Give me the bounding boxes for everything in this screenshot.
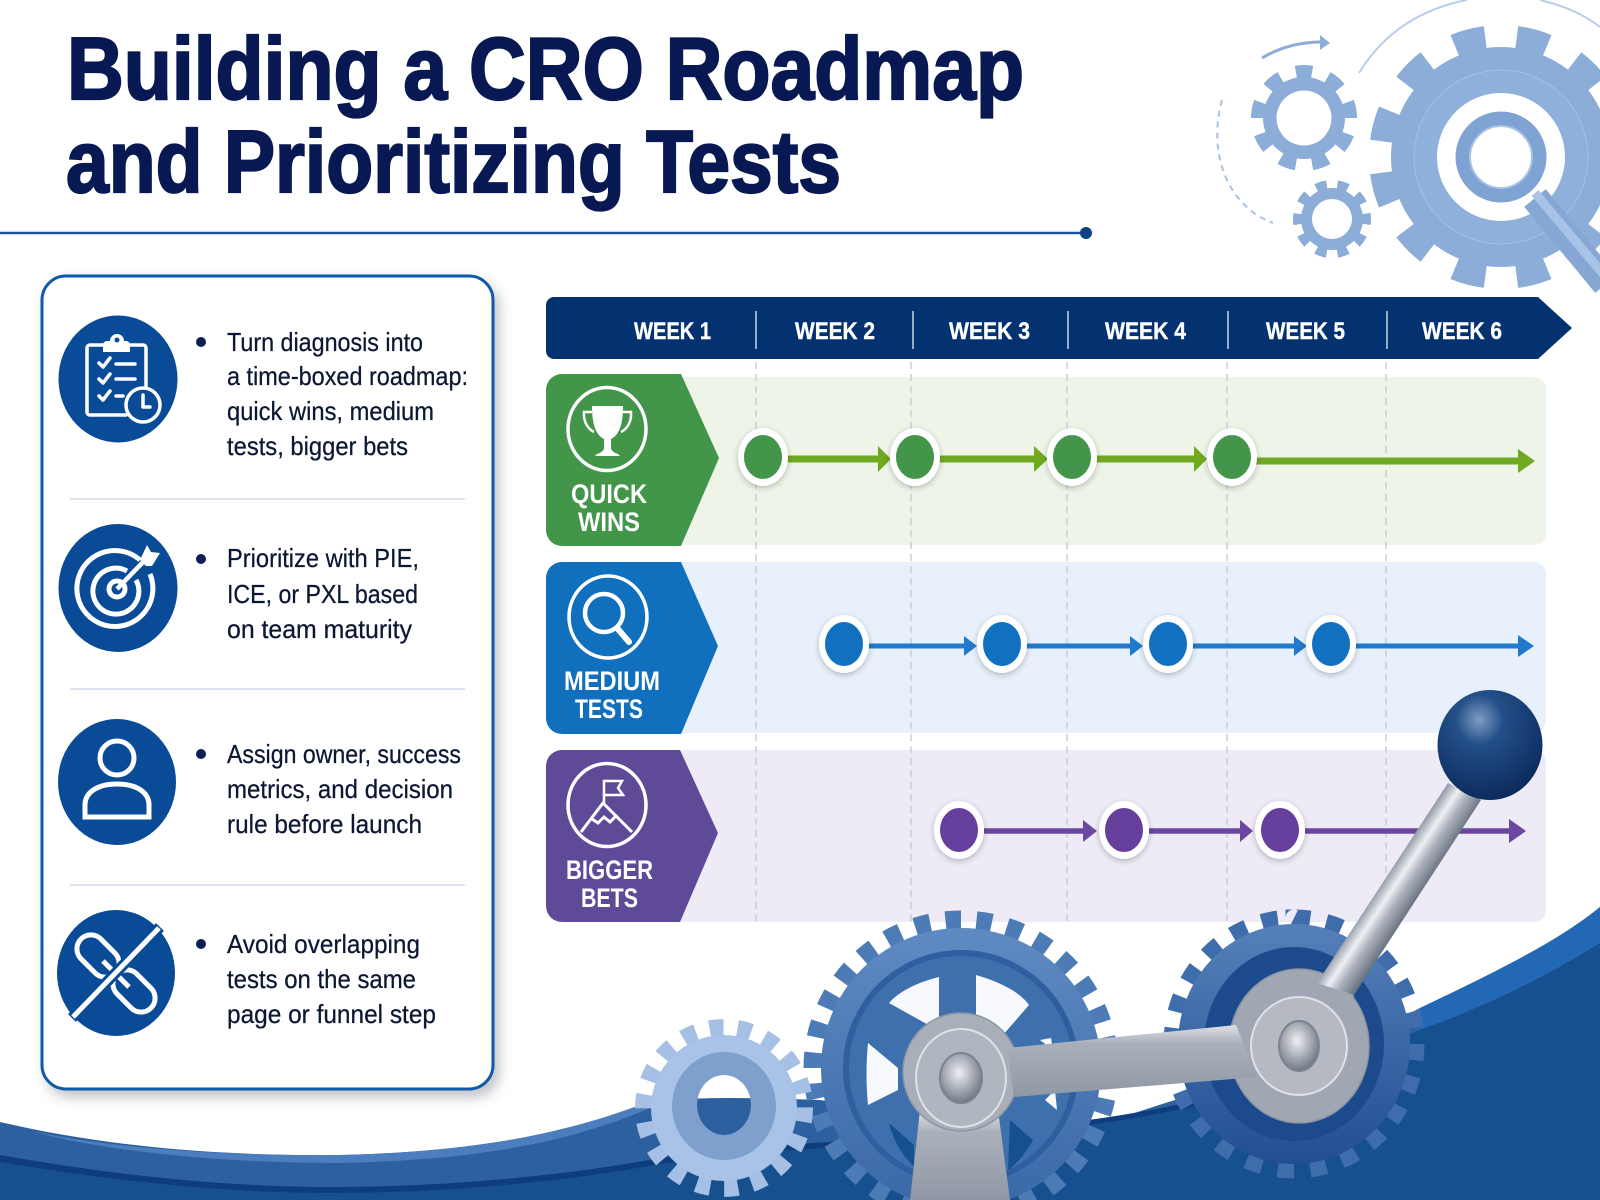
decorative gears with magnifier — [1217, 0, 1600, 292]
bullet text 1: tests, bigger bets — [227, 431, 408, 461]
row: bigger bets: BIGGER — [566, 855, 653, 885]
row: quick wins — [546, 374, 1546, 546]
lever knob — [1438, 690, 1542, 800]
timeline header: weeks: WEEK 5 — [1266, 318, 1345, 345]
small light gear — [644, 1028, 804, 1188]
bullet text 1: Turn diagnosis into — [227, 327, 423, 357]
bullet text 4: tests on the same — [227, 964, 416, 994]
week grid lines — [756, 362, 1386, 922]
bullet text 1: quick wins, medium — [227, 396, 434, 426]
large blue gear — [813, 920, 1109, 1200]
timeline header: weeks: WEEK 1 — [634, 318, 711, 345]
timeline header: weeks: WEEK 4 — [1105, 318, 1186, 345]
icon: magnifier — [569, 576, 647, 658]
row: medium tests: MEDIUM — [564, 666, 660, 696]
icon: person — [58, 719, 176, 845]
bullet text 3: Assign owner, success — [227, 739, 461, 769]
title: Building a CRO Roadmap — [67, 19, 1024, 118]
timeline header: weeks: WEEK 6 — [1422, 318, 1502, 345]
row: bigger bets — [546, 750, 1546, 922]
bullet text 3: metrics, and decision — [227, 774, 453, 804]
title — [66, 19, 1024, 211]
bullet text 1: a time-boxed roadmap: — [227, 361, 468, 391]
bullet text 3: rule before launch — [227, 809, 422, 839]
bullet text 4 — [196, 929, 436, 1029]
timeline header: weeks: WEEK 2 — [795, 318, 875, 345]
timeline: quick wins — [738, 428, 1535, 486]
bullet text 2: on team maturity — [227, 614, 412, 644]
icon: target with arrow — [58, 524, 178, 652]
bullet text 2: Prioritize with PIE, — [227, 543, 419, 573]
right blue gear — [1172, 918, 1416, 1170]
timeline: medium tests — [819, 615, 1534, 673]
icon: broken link — [57, 910, 175, 1036]
row: medium tests — [546, 562, 1546, 734]
icon: mountain flag — [568, 764, 646, 846]
row: quick wins: WINS — [578, 507, 640, 537]
timeline: bigger bets — [934, 801, 1526, 859]
background wave — [0, 907, 1600, 1200]
row: quick wins: QUICK — [571, 479, 647, 509]
bullet text 1 — [196, 327, 468, 461]
bullet text 3 — [196, 739, 461, 839]
bullet text 2: ICE, or PXL based — [227, 579, 418, 609]
icon: trophy — [568, 388, 646, 470]
timeline header: weeks: WEEK 3 — [949, 318, 1030, 345]
row: bigger bets: BETS — [581, 883, 638, 913]
lever mechanism — [903, 690, 1542, 1200]
title rule — [0, 227, 1092, 239]
panel: key guidance — [42, 276, 493, 1089]
timeline header: weeks — [546, 297, 1572, 359]
bullet text 4: page or funnel step — [227, 999, 436, 1029]
icon: clipboard with clock — [58, 316, 178, 442]
row: medium tests: TESTS — [575, 694, 643, 724]
bullet text 4: Avoid overlapping — [227, 929, 420, 959]
bullet text 2 — [196, 543, 419, 644]
title: and Prioritizing Tests — [66, 112, 841, 211]
